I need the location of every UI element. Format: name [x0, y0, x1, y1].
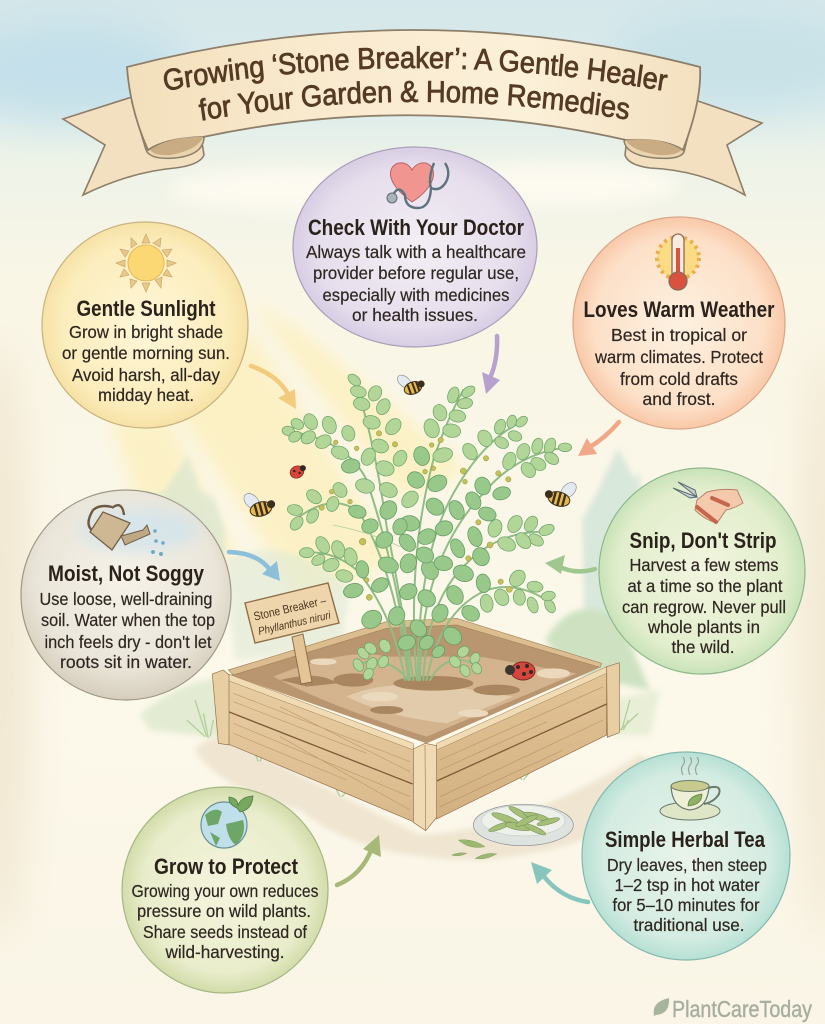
- icon: watering can: [88, 505, 165, 556]
- body text: pressure on wild plants.: [137, 901, 311, 921]
- title banner: [61, 29, 764, 197]
- panel: check with your doctor: [293, 147, 537, 347]
- ground shadow: [195, 739, 663, 860]
- body text: from cold drafts: [620, 369, 738, 389]
- icon: ladybug flying: [288, 462, 309, 480]
- body text: Best in tropical or: [611, 325, 747, 345]
- body text: whole plants in: [647, 617, 760, 637]
- small flower clusters: [319, 431, 512, 600]
- body text: Harvest a few stems: [630, 555, 779, 575]
- icon: ladybug on soil: [505, 662, 535, 680]
- heading: Moist, Not Soggy: [48, 561, 205, 586]
- sign text: Phyllanthus niruri: [257, 609, 332, 638]
- panel: gentle sunlight: [42, 222, 248, 428]
- grass tufts: [187, 700, 638, 797]
- heading: Snip, Don't Strip: [630, 528, 776, 553]
- left ribbon tail: [63, 97, 204, 195]
- plant: phyllanthus niruri: [281, 372, 572, 682]
- darker leaves: [340, 444, 512, 660]
- body text: [40, 589, 215, 672]
- arrow: sunlight to plant: [251, 366, 296, 409]
- body text: Use loose, well-draining: [40, 589, 212, 609]
- icon: bee top: [393, 366, 427, 399]
- panel: snip, don't strip: [599, 468, 805, 674]
- sign text: [252, 593, 332, 638]
- icon: bee right: [543, 474, 581, 510]
- panel: grow to protect: [122, 787, 328, 993]
- body text: or health issues.: [352, 305, 478, 325]
- body text: wild-harvesting.: [165, 942, 284, 962]
- heading: Loves Warm Weather: [584, 297, 775, 322]
- right panel: [437, 668, 607, 819]
- panel: simple herbal tea: [582, 752, 790, 960]
- heading: Grow to Protect: [154, 854, 299, 879]
- right ribbon tail: [625, 100, 762, 195]
- ribbon curl right: [624, 120, 692, 158]
- light leaves: [281, 372, 572, 682]
- ribbon curl left: [140, 120, 204, 158]
- body text: 1–2 tsp in hot water: [614, 875, 760, 895]
- heading: Simple Herbal Tea: [605, 827, 766, 852]
- sign board: [245, 583, 339, 643]
- body text: roots sit in water.: [60, 652, 192, 672]
- left panel: [228, 675, 413, 822]
- body text: provider before regular use,: [313, 263, 519, 283]
- plate of dried leaves: [452, 804, 573, 859]
- body text: Share seeds instead of: [143, 922, 307, 942]
- corner posts: [212, 670, 229, 745]
- sun rays: [110, 300, 470, 600]
- heading: Gentle Sunlight: [76, 296, 216, 321]
- icon: thermometer with sun: [657, 234, 699, 290]
- body text: [62, 322, 230, 405]
- body text: especially with medicines: [322, 285, 510, 305]
- body text: midday heat.: [98, 385, 194, 405]
- icon: sun: [116, 234, 176, 292]
- body text: Grow in bright shade: [69, 322, 223, 342]
- arrow: snip to plant: [545, 555, 595, 574]
- panel: loves warm weather: [573, 217, 785, 429]
- arrow: moisture to plant: [229, 552, 280, 581]
- arrow: doctor to plant: [482, 336, 500, 394]
- arrow: tea to plate: [531, 862, 588, 902]
- body text: and frost.: [642, 389, 716, 409]
- body text: Always talk with a healthcare: [306, 242, 526, 262]
- icon: tea cup: [660, 757, 720, 820]
- body text: traditional use.: [634, 915, 744, 935]
- icon: bee left: [239, 485, 277, 520]
- arrow: grow to protect: [337, 835, 381, 885]
- icon: earth with sprout: [201, 796, 253, 848]
- title text: Growing ‘Stone Breaker’: A Gentle Healer: [164, 46, 668, 91]
- heading: Check With Your Doctor: [308, 215, 524, 240]
- body text: soil. Water when the top: [41, 610, 215, 630]
- plant sign: stone breaker: [245, 583, 339, 684]
- ribbon main band: [127, 30, 700, 150]
- title text: for Your Garden & Home Remedies: [198, 80, 630, 121]
- sign post: [292, 634, 312, 684]
- body text: [306, 242, 526, 325]
- raised garden bed: [187, 618, 638, 859]
- arrow: warm weather to plant: [578, 422, 619, 456]
- body text: [622, 555, 786, 657]
- body text: can regrow. Never pull: [622, 597, 786, 617]
- body text: inch feels dry - don't let: [44, 632, 212, 652]
- stems: [288, 377, 567, 680]
- icon: heart and stethoscope: [387, 163, 448, 208]
- body text: or gentle morning sun.: [62, 343, 230, 363]
- distant hills and trees: [140, 448, 660, 740]
- soil: [230, 622, 600, 743]
- body text: for 5–10 minutes for: [612, 895, 760, 915]
- body text: [594, 325, 763, 409]
- panel: moist, not soggy: [21, 490, 231, 700]
- icon: hand with secateurs: [673, 482, 743, 523]
- sign text: Stone Breaker –: [252, 593, 328, 623]
- body text: Dry leaves, then steep: [607, 855, 767, 875]
- body text: warm climates. Protect: [594, 347, 763, 367]
- body text: Growing your own reduces: [132, 881, 319, 901]
- back rims: [228, 618, 602, 675]
- title text: [164, 46, 668, 121]
- body text: at a time so the plant: [628, 576, 783, 596]
- body text: [132, 881, 319, 962]
- body text: [607, 855, 767, 935]
- body text: Avoid harsh, all-day: [72, 365, 220, 385]
- body text: the wild.: [672, 637, 734, 657]
- ribbon curl shadows: [150, 137, 682, 155]
